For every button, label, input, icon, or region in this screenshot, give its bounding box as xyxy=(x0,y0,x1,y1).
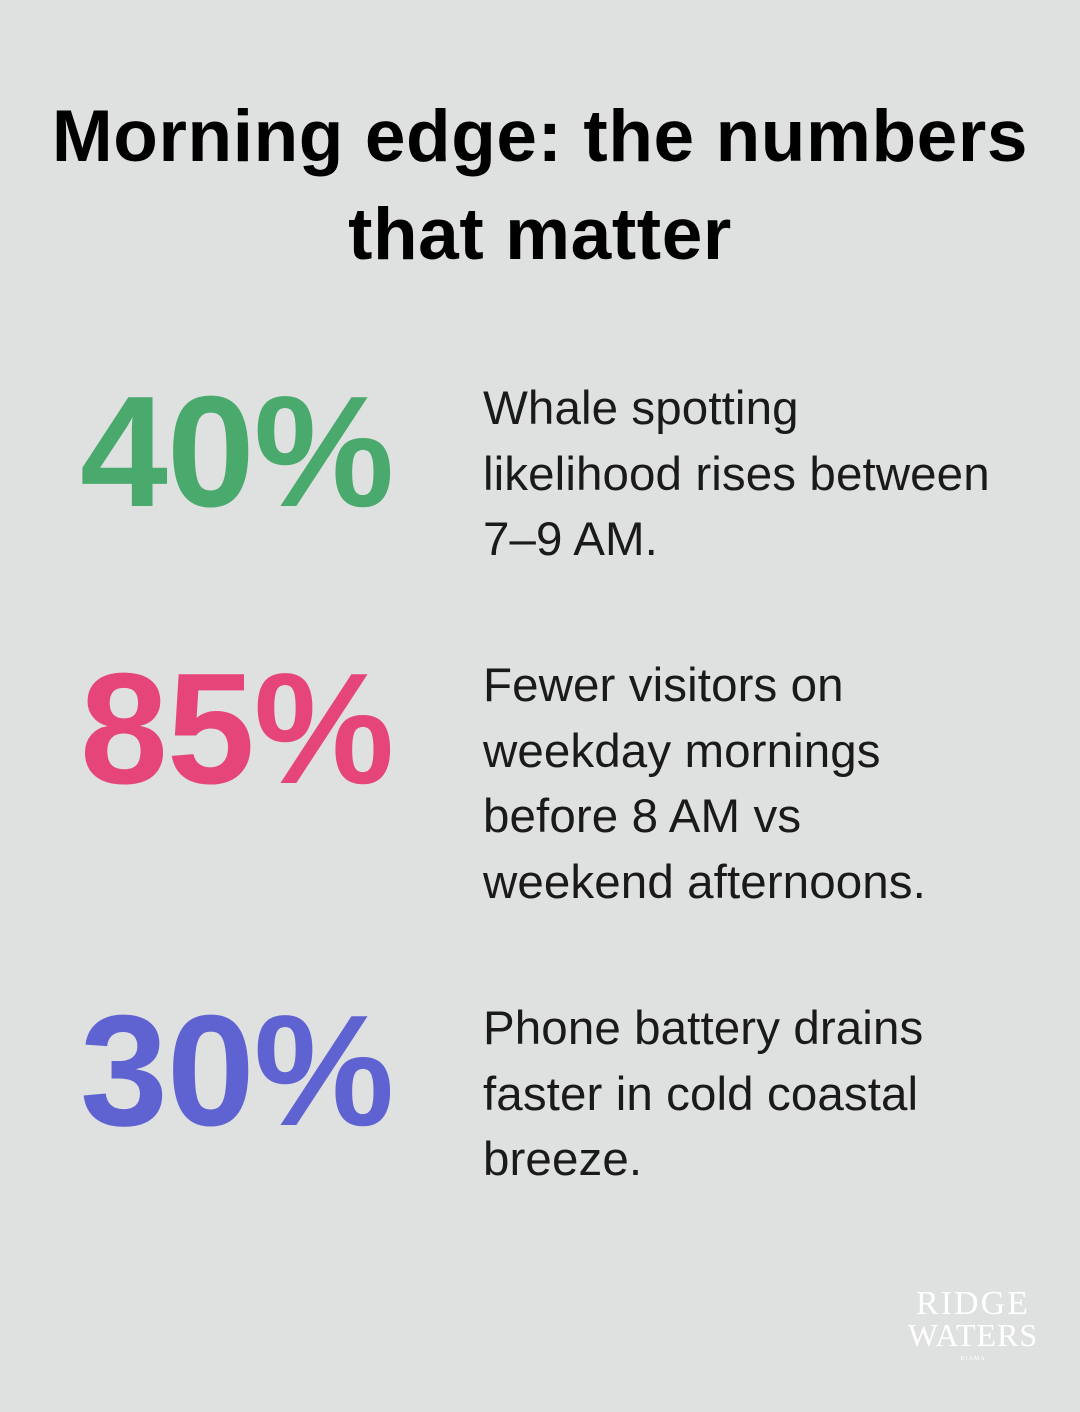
logo xyxy=(908,1285,1038,1362)
text: phone battery xyxy=(483,1002,923,1186)
stat: 30%: 30% xyxy=(80,983,393,1159)
stat: 40%: 40% xyxy=(80,364,393,540)
text: fewer visitors xyxy=(483,659,926,908)
text: fewer visitors: Fewer visitors on xyxy=(483,659,844,712)
text: fewer visitors: weekend afternoons. xyxy=(483,856,926,908)
title: Morning edge: the numbers xyxy=(52,96,1028,177)
text: phone battery: breeze. xyxy=(483,1133,642,1186)
text: fewer visitors: weekday mornings xyxy=(483,724,881,778)
title xyxy=(52,96,1028,275)
stat: 85%: 85% xyxy=(80,641,393,817)
text: whale spotting xyxy=(483,382,990,566)
text: fewer visitors: before 8 AM vs xyxy=(483,790,801,843)
text: phone battery: Phone battery drains xyxy=(483,1002,923,1055)
text: whale spotting: Whale spotting xyxy=(483,382,799,435)
logo: WATERS xyxy=(908,1317,1038,1353)
logo: RIDGE xyxy=(916,1285,1030,1322)
text: phone battery: faster in cold coastal xyxy=(483,1068,918,1120)
title: that matter xyxy=(348,194,732,275)
logo: KIAMA xyxy=(960,1356,986,1362)
text: whale spotting: likelihood rises between xyxy=(483,448,990,500)
text: whale spotting: 7–9 AM. xyxy=(483,513,658,566)
